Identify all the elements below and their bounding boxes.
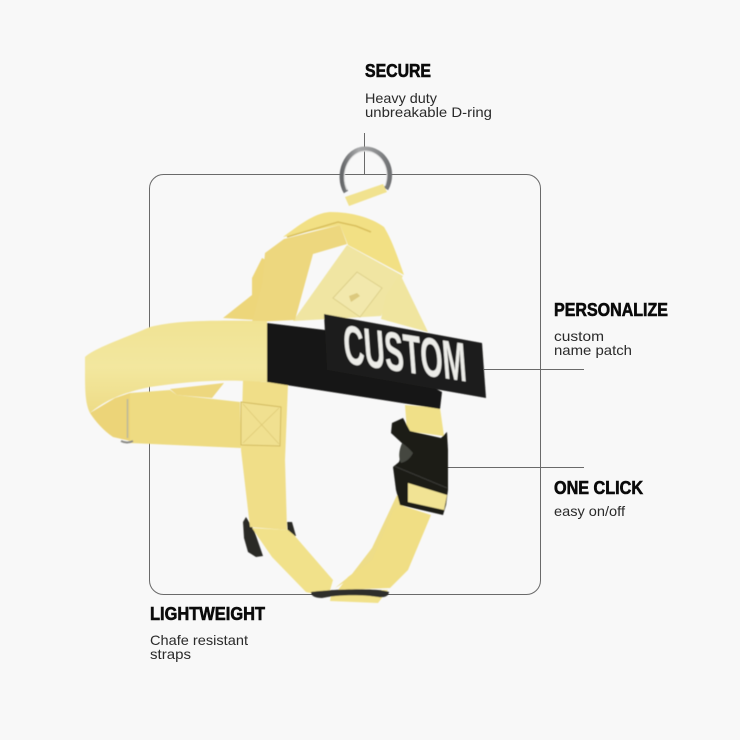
strap above buckle <box>405 405 444 436</box>
callout: one click <box>554 478 643 519</box>
callout: secure <box>365 61 492 120</box>
right chest strap <box>293 245 428 332</box>
diamond patch <box>333 272 382 317</box>
callout: secure: Heavy duty <box>365 90 437 106</box>
lower strap <box>90 383 281 448</box>
callout: secure: unbreakable D-ring <box>365 104 492 120</box>
leader lines <box>364 133 584 468</box>
bottom slider <box>311 589 389 598</box>
D-ring <box>342 149 390 206</box>
callout: personalize: name patch <box>554 342 632 358</box>
callout: personalize: PERSONALIZE <box>554 300 668 320</box>
main belt strap <box>85 321 267 413</box>
right lower strap <box>330 495 431 603</box>
patch text: CUSTOM <box>341 312 468 394</box>
left vertical strap <box>241 380 288 530</box>
callout: one click: ONE CLICK <box>554 478 643 498</box>
rear strap fold <box>223 258 270 320</box>
shoulder loop <box>283 212 404 275</box>
callout: personalize: custom <box>554 328 604 344</box>
lower left slider <box>243 517 296 557</box>
callout: lightweight: LIGHTWEIGHT <box>150 604 265 624</box>
callout: lightweight: Chafe resistant <box>150 632 248 648</box>
frame outline <box>150 174 540 594</box>
buckle <box>391 418 448 515</box>
belt inner back <box>90 393 130 441</box>
callout: lightweight: straps <box>150 646 191 662</box>
harness product illustration <box>85 149 486 603</box>
callout: secure: SECURE <box>365 61 431 81</box>
stitched box <box>241 402 281 446</box>
velcro panel <box>267 323 442 409</box>
left shoulder strap <box>252 225 347 322</box>
callout: personalize <box>554 300 668 358</box>
custom name patch <box>324 312 486 398</box>
callout: one click: easy on/off <box>554 503 625 519</box>
callout: lightweight <box>150 604 265 662</box>
lower left strap <box>252 528 333 597</box>
